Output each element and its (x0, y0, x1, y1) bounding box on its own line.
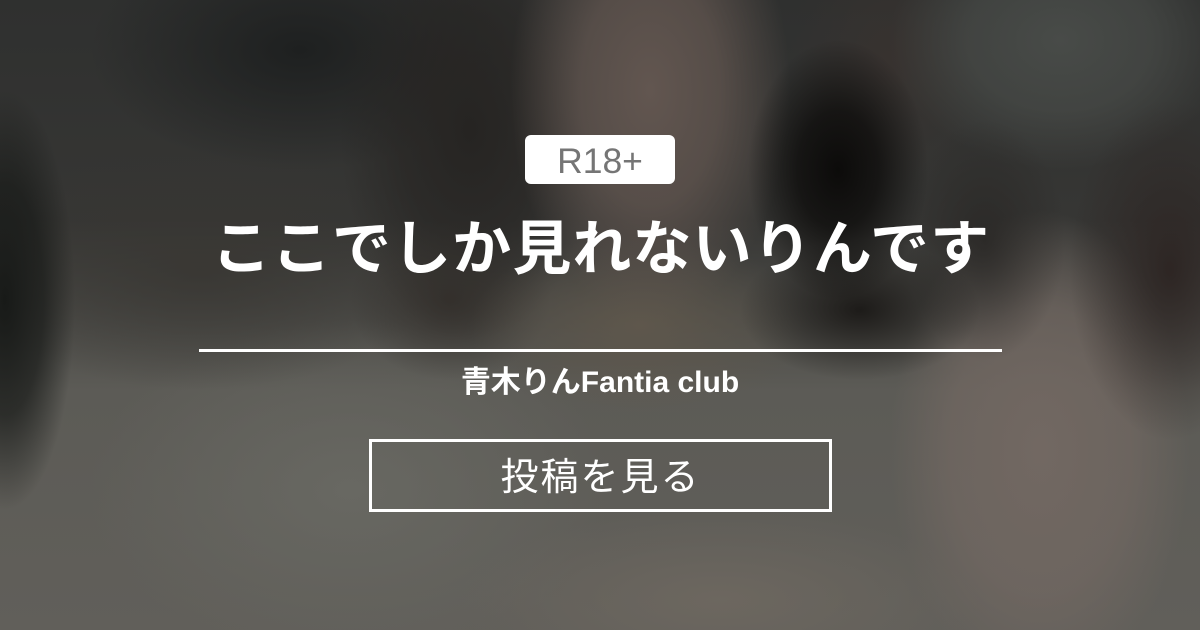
button: view posts (369, 439, 832, 512)
club name: 青木りんFantia club (461, 366, 739, 399)
divider line (199, 349, 1002, 352)
button: view posts: 投稿を見る (500, 457, 700, 499)
title: ここでしか見れないりんです (212, 216, 990, 282)
badge: R18+ (525, 135, 675, 184)
badge: R18+: R18+ (557, 141, 643, 181)
